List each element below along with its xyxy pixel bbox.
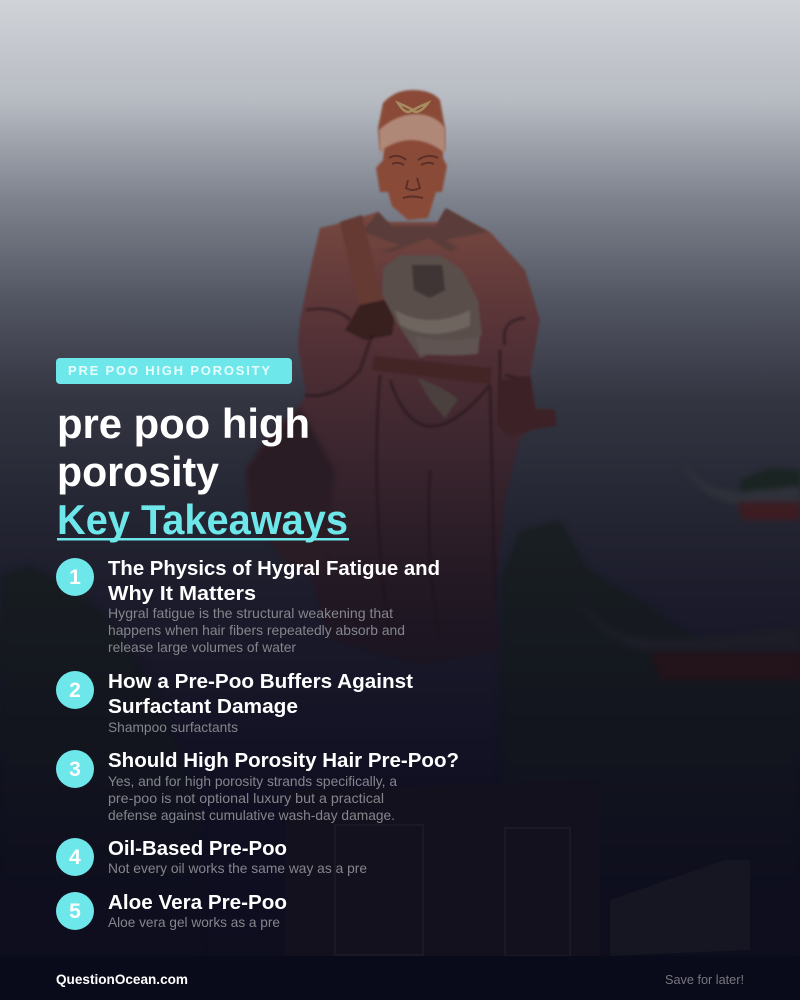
item 2: surfactant damage xyxy=(56,671,413,735)
item 2: surfactant damage: How a Pre-Poo Buffers Against xyxy=(108,671,413,693)
footer bar: QuestionOcean.com xyxy=(56,971,188,987)
statue pedestal xyxy=(285,780,600,956)
face shading xyxy=(389,156,438,198)
item 4: oil-based pre-poo: 4 xyxy=(69,846,81,869)
badge: PRE POO HIGH POROSITY xyxy=(68,363,270,378)
item 5: aloe vera pre-poo xyxy=(56,892,287,930)
item 3: should high porosity hair pre-poo xyxy=(56,750,459,823)
scroll in arm xyxy=(340,215,382,308)
title: Key Takeaways xyxy=(57,496,348,543)
item 1: hygral fatigue xyxy=(56,558,440,655)
item 2: surfactant damage: 2 xyxy=(69,679,81,702)
title xyxy=(57,400,349,543)
item 4: oil-based pre-poo xyxy=(56,838,367,876)
item 5: aloe vera pre-poo: 5 xyxy=(69,900,81,923)
statue hat crown xyxy=(378,90,445,150)
item 1: hygral fatigue: 1 xyxy=(69,566,81,589)
robe folds xyxy=(305,309,530,640)
badge xyxy=(56,358,292,384)
footer bar xyxy=(0,956,800,1000)
background: trees and temple roofs xyxy=(0,460,800,956)
collar xyxy=(362,208,488,252)
item 5: aloe vera pre-poo: Aloe vera gel works as a pre xyxy=(108,914,280,930)
left hand xyxy=(345,300,396,340)
item 4: oil-based pre-poo: Not every oil works the same way as a pre xyxy=(108,860,367,876)
title: porosity xyxy=(57,448,220,495)
item 4: oil-based pre-poo: Oil-Based Pre-Poo xyxy=(108,838,287,860)
item 2: surfactant damage: Surfactant Damage xyxy=(108,696,298,718)
statue robe and body xyxy=(246,210,556,665)
item 3: should high porosity hair pre-poo: 3 xyxy=(69,758,81,781)
belt xyxy=(372,356,492,384)
illustration: bronze admiral statue xyxy=(246,90,750,956)
item 1: hygral fatigue: Why It Matters xyxy=(108,583,256,605)
title: pre poo high xyxy=(57,400,310,447)
item 2: surfactant damage: Shampoo surfactants xyxy=(108,719,238,735)
item 3: should high porosity hair pre-poo: Should High Porosity Hair Pre-Poo? xyxy=(108,750,459,772)
item 1: hygral fatigue: The Physics of Hygral Fatigue and xyxy=(108,558,440,580)
statue dark cloak at left xyxy=(246,408,335,575)
statue head and ears xyxy=(376,135,447,220)
statue hat band xyxy=(379,114,445,155)
item 1: hygral fatigue: Hygral fatigue is the structural weakening that xyxy=(108,605,393,621)
item 3: should high porosity hair pre-poo: Yes, and for high porosity strands specifically, a xyxy=(108,773,397,789)
item 1: hygral fatigue: release large volumes of water xyxy=(108,639,296,655)
footer bar: Save for later! xyxy=(665,972,744,987)
item 5: aloe vera pre-poo: Aloe Vera Pre-Poo xyxy=(108,892,287,914)
dragon emblem on chest xyxy=(382,255,482,358)
dragon tail on robe xyxy=(418,378,458,418)
item 1: hygral fatigue: happens when hair fibers repeatedly absorb and xyxy=(108,622,405,638)
right hand and sword hilt xyxy=(497,376,556,437)
item 3: should high porosity hair pre-poo: pre-poo is not optional luxury but a practical xyxy=(108,790,384,806)
plaques on pedestal xyxy=(335,825,570,956)
hat ornament xyxy=(398,103,428,112)
temple wall on right xyxy=(610,860,750,956)
item 3: should high porosity hair pre-poo: defense against cumulative wash-day damage. xyxy=(108,807,395,823)
